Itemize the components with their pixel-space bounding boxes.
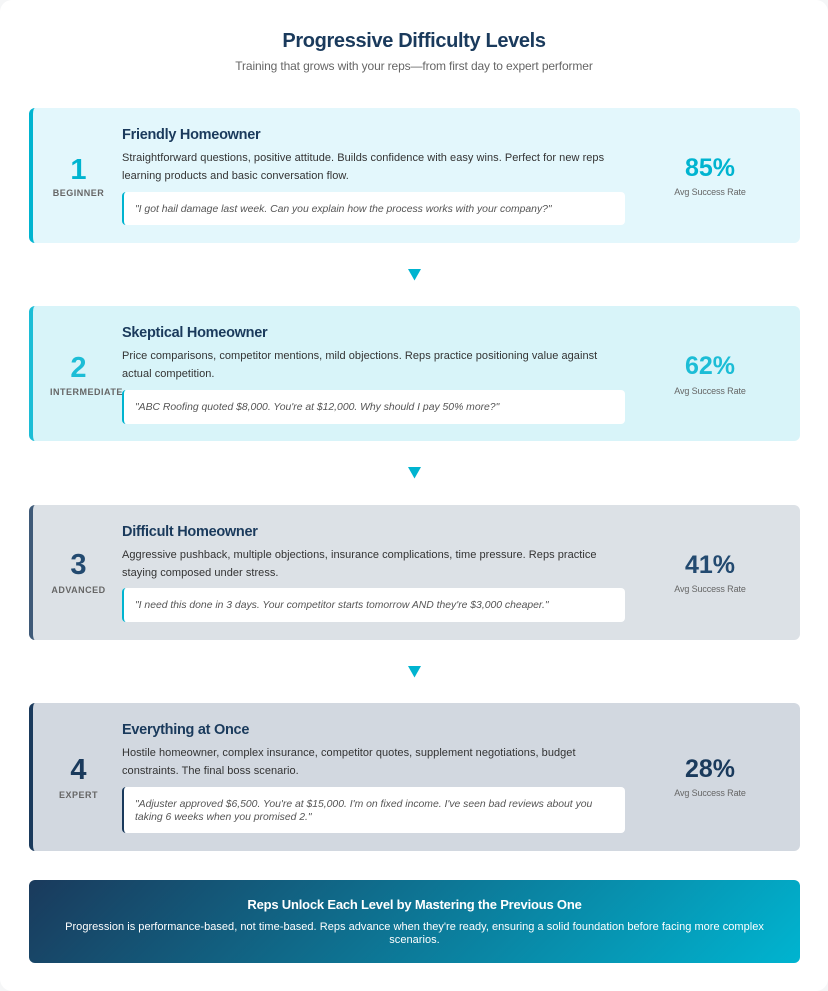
panel: level 4 expert bbox=[29, 703, 800, 851]
success rate label: Avg Success Rate bbox=[674, 386, 746, 396]
quote: "ABC Roofing quoted $8,000. You're at $12,000. Why should I pay 50% more?" bbox=[135, 402, 499, 413]
arrow bbox=[408, 467, 421, 478]
level number 2: 2 bbox=[70, 352, 87, 384]
level heading: Difficult Homeowner bbox=[122, 524, 258, 540]
callout heading: Reps Unlock Each Level by Mastering the Previous One bbox=[247, 897, 582, 912]
level number 1: 1 bbox=[70, 154, 87, 186]
level description: Straightforward questions, positive attitude. Builds confidence with easy wins. Perfect for new reps learning products and basic conversation flow. bbox=[122, 152, 604, 182]
panel: level 2 intermediate bbox=[29, 306, 800, 441]
success rate label: Avg Success Rate bbox=[674, 584, 746, 594]
quote bbox=[122, 787, 625, 833]
success rate label: Avg Success Rate bbox=[674, 187, 746, 197]
level label: ADVANCED bbox=[51, 585, 106, 595]
success rate value: 62% bbox=[685, 352, 735, 380]
panel: level 3 advanced bbox=[29, 505, 800, 640]
success rate value: 41% bbox=[685, 551, 735, 579]
arrow bbox=[408, 269, 421, 280]
panel: level 1 beginner bbox=[29, 108, 800, 243]
title: Progressive Difficulty Levels bbox=[282, 30, 546, 52]
quote bbox=[122, 588, 625, 622]
level label: EXPERT bbox=[59, 790, 98, 800]
level number 3: 3 bbox=[70, 549, 87, 581]
level label: BEGINNER bbox=[53, 188, 104, 198]
arrow bbox=[408, 666, 421, 678]
subtitle: Training that grows with your reps—from first day to expert performer bbox=[235, 59, 593, 73]
quote: "I need this done in 3 days. Your competitor starts tomorrow AND they're $3,000 cheaper." bbox=[135, 600, 549, 611]
level description: Price comparisons, competitor mentions, mild objections. Reps practice positioning value against actual competition. bbox=[122, 350, 597, 380]
level heading: Everything at Once bbox=[122, 722, 249, 738]
level description: Aggressive pushback, multiple objections, insurance complications, time pressure. Reps practice staying composed under stress. bbox=[122, 549, 597, 579]
level heading: Friendly Homeowner bbox=[122, 127, 260, 143]
level description: Hostile homeowner, complex insurance, competitor quotes, supplement negotiations, budget constraints. The final boss scenario. bbox=[122, 747, 576, 777]
level number 4: 4 bbox=[70, 754, 87, 786]
success rate value: 28% bbox=[685, 755, 735, 783]
quote: "I got hail damage last week. Can you explain how the process works with your company?" bbox=[135, 204, 552, 215]
callout: progression summary bbox=[29, 880, 800, 963]
success rate value: 85% bbox=[685, 154, 735, 182]
quote: "Adjuster approved $6,500. You're at $15,000. I'm on fixed income. I've seen bad reviews about you taking 6 weeks when you promised 2." bbox=[135, 799, 592, 823]
quote bbox=[122, 390, 625, 424]
success rate label: Avg Success Rate bbox=[674, 788, 746, 798]
callout text: Progression is performance-based, not time-based. Reps advance when they're ready, ensuring a solid foundation before facing more complex scenarios. bbox=[65, 921, 764, 946]
level heading: Skeptical Homeowner bbox=[122, 325, 267, 341]
quote bbox=[122, 192, 625, 225]
level label: INTERMEDIATE bbox=[50, 387, 123, 397]
